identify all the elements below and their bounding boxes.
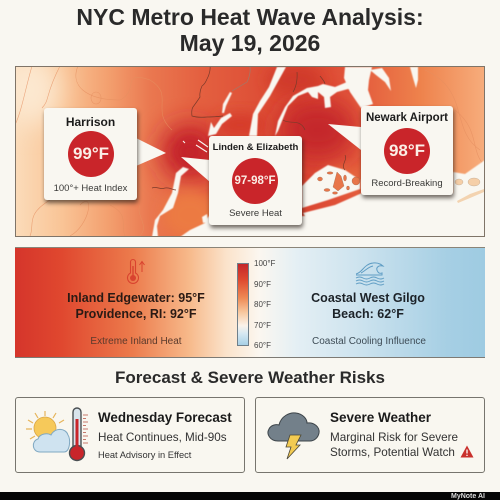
callout box: [361, 106, 453, 195]
callout pointer: [137, 138, 166, 166]
temperature badge: 97-98°F: [234, 175, 276, 187]
legend: temperature scale: 60°F: [254, 341, 271, 350]
temperature badge: 98°F: [389, 141, 425, 160]
title: May 19, 2026: [180, 30, 320, 56]
footer bar: [0, 492, 500, 500]
title: NYC Metro Heat Wave Analysis:: [76, 4, 424, 30]
callout pointer: [328, 124, 361, 150]
Newark Bay: [208, 113, 232, 136]
severe heading: Severe Weather: [330, 410, 431, 425]
temperature badge: [68, 131, 114, 177]
legend: temperature scale: 80°F: [254, 300, 271, 309]
inland temperatures: Inland Edgewater: 95°F: [67, 291, 205, 305]
panel: severe weather: [255, 397, 485, 473]
icon: storm cloud with lightning: [267, 412, 320, 460]
location name: Harrison: [66, 115, 115, 129]
severe detail: [330, 431, 458, 458]
panel: inland vs coastal banner: [15, 247, 485, 358]
legend: temperature scale: [237, 259, 276, 350]
rivers: [152, 66, 346, 190]
coastal temperature: Coastal West Gilgo: [311, 291, 425, 305]
scale labels: 100°F: [254, 259, 275, 268]
small harbor marks: [183, 140, 208, 152]
callout pointer: [181, 157, 209, 181]
Jamaica Bay: [302, 165, 360, 208]
temperature badge: [384, 128, 430, 174]
panel: heat map: [15, 66, 485, 237]
inland temperatures: [67, 291, 205, 321]
coastal caption: Coastal Cooling Influence: [312, 336, 426, 347]
coastal temperature: [311, 291, 425, 321]
callout: Linden and Elizabeth: [181, 136, 306, 232]
coastal temperature: Beach: 62°F: [332, 307, 404, 321]
forecast advisory: Heat Advisory in Effect: [98, 450, 191, 460]
South shore marsh: [453, 160, 485, 195]
note: Severe Heat: [229, 208, 282, 219]
location name: Linden & Elizabeth: [213, 142, 298, 153]
note: Record-Breaking: [371, 178, 443, 189]
forecast heading: Wednesday Forecast: [98, 410, 232, 425]
East River and inlets: [274, 82, 350, 136]
legend: temperature scale: 70°F: [254, 321, 271, 330]
severe detail: Storms, Potential Watch: [330, 446, 455, 458]
contour lines: [15, 66, 484, 236]
legend: temperature scale: 90°F: [254, 280, 271, 289]
temperature badge: [232, 158, 278, 204]
marsh patches: [455, 178, 480, 186]
forecast detail: Heat Continues, Mid-90s: [98, 431, 227, 444]
temperature badge: 99°F: [73, 144, 109, 163]
callout box: [44, 108, 137, 200]
callout box: [209, 136, 302, 225]
map: temperature field: [15, 66, 485, 237]
Arthur Kill: [152, 167, 189, 237]
title: [76, 4, 424, 56]
note: 100°+ Heat Index: [54, 183, 127, 194]
inland temperatures: Providence, RI: 92°F: [75, 307, 196, 321]
water: coastline and ocean: [152, 67, 485, 237]
Hudson: [249, 67, 286, 136]
icon: warning triangle: [460, 446, 474, 458]
icon: thermometer with up arrow: [127, 259, 145, 284]
lower harbor and ocean: [180, 192, 484, 236]
barrier beach: [457, 189, 484, 203]
watermark: MyNote AI: [451, 493, 485, 500]
inland caption: Extreme Inland Heat: [90, 336, 182, 347]
panel: Wednesday forecast: [15, 397, 245, 473]
color bar: [237, 263, 249, 346]
icon: wave: [356, 262, 384, 286]
callout: Harrison: [42, 108, 166, 206]
icon: sun, cloud and thermometer: [26, 407, 88, 462]
Jamaica Bay marsh islands: [318, 172, 360, 194]
severe detail: Marginal Risk for Severe: [330, 431, 458, 444]
callout: Newark Airport: [328, 106, 458, 202]
location name: Newark Airport: [366, 112, 448, 124]
heading: forecast: Forecast & Severe Weather Risks: [115, 368, 385, 387]
Long Island Sound: [344, 67, 373, 108]
